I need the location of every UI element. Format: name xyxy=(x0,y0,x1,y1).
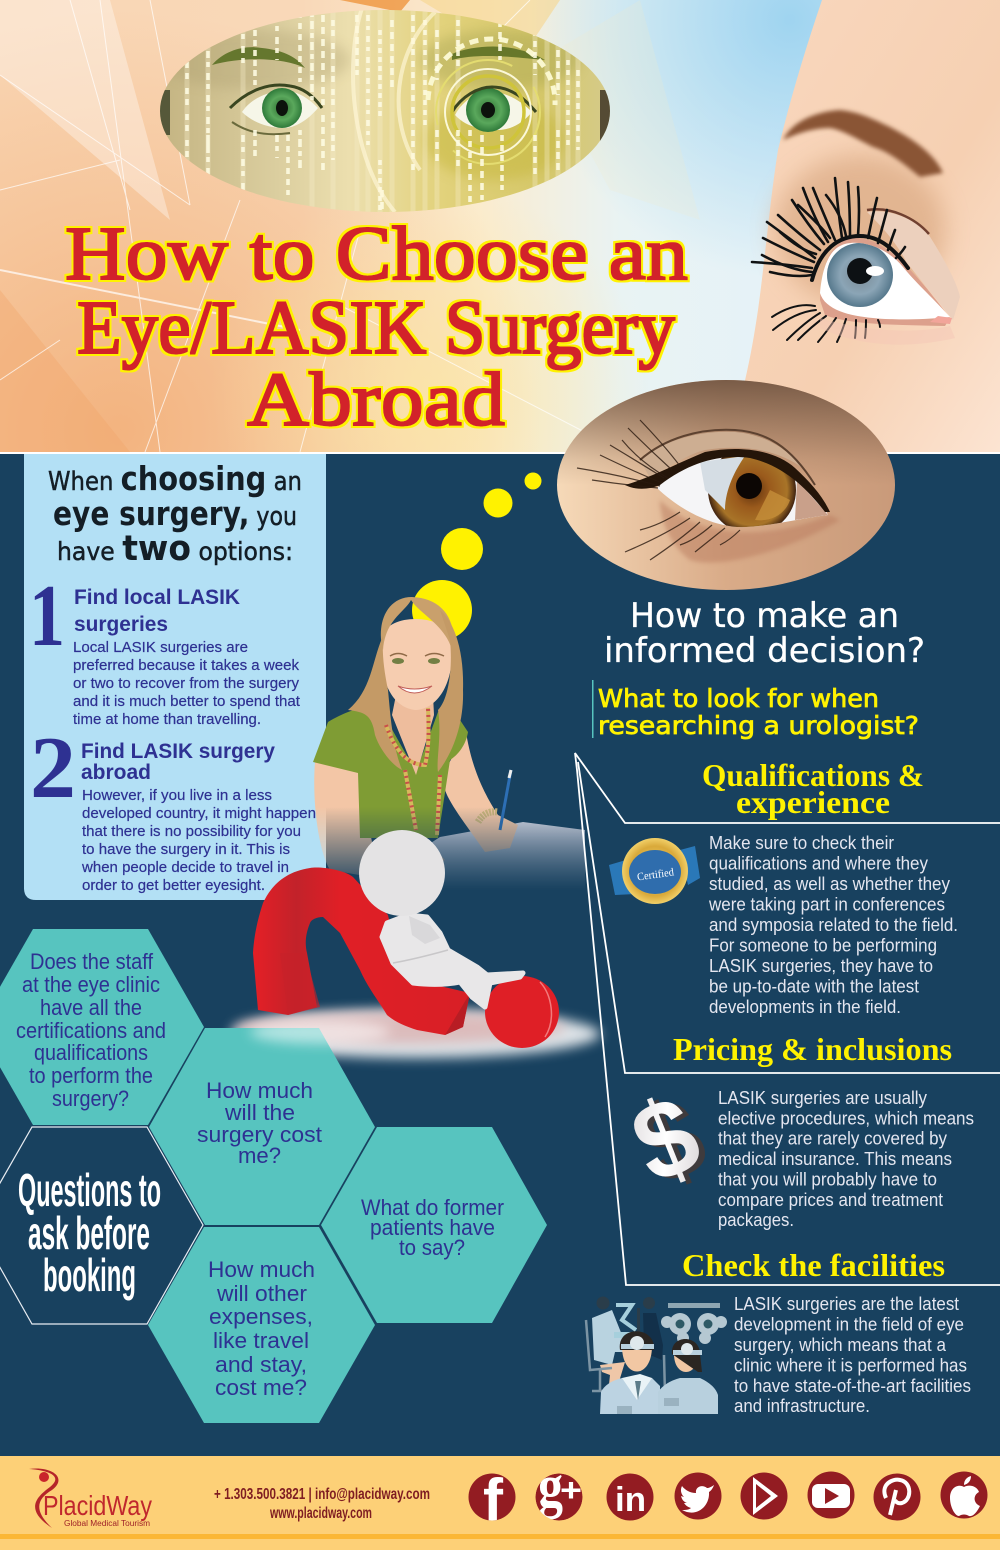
option 2: 2 xyxy=(30,720,76,817)
hexagon: former patients: patients have xyxy=(370,1215,495,1240)
section: qualifications: For someone to be performing xyxy=(709,936,937,956)
option 1: or two to recover from the surgery xyxy=(73,675,299,692)
icon: eye doctors xyxy=(586,1296,727,1414)
section: qualifications: experience xyxy=(736,784,890,820)
section: qualifications: Make sure to check their xyxy=(709,833,894,853)
icon: facebook xyxy=(468,1474,516,1520)
hexagon: questions heading: ask before xyxy=(28,1207,150,1259)
title: How to Choose an xyxy=(65,212,688,296)
brown eye oval xyxy=(557,380,895,590)
icon: play store xyxy=(740,1472,788,1520)
hexagon: questions heading: Questions to xyxy=(18,1164,161,1216)
title xyxy=(65,212,688,442)
red question mark with white figure xyxy=(253,830,559,1048)
option 1: and it is much better to spend that xyxy=(73,693,301,710)
eye socket shading xyxy=(775,155,945,305)
right eye xyxy=(428,39,555,164)
social icons xyxy=(468,1472,988,1520)
top oval: digital eyes xyxy=(158,8,612,212)
logo xyxy=(29,1469,152,1528)
hexagon: surgery cost: me? xyxy=(238,1143,281,1168)
hexagon: staff certifications: to perform the xyxy=(29,1063,153,1088)
hexagon: other expenses: will other xyxy=(216,1281,307,1306)
panel heading xyxy=(48,459,302,569)
hexagon: questions heading: booking xyxy=(43,1249,136,1301)
option 2: to have the surgery in it. This is xyxy=(82,841,290,858)
title: Eye/LASIK Surgery xyxy=(77,286,675,370)
researching sub-heading xyxy=(592,680,919,740)
upper lash line xyxy=(625,449,830,512)
eye white xyxy=(820,243,950,319)
navy background xyxy=(0,454,1000,1456)
section: qualifications: studied, as well as whether they xyxy=(709,874,950,894)
icon: google plus xyxy=(536,1474,582,1520)
hexagon: former patients: to say? xyxy=(399,1235,465,1260)
section: pricing: packages. xyxy=(718,1210,794,1230)
option 1: Local LASIK surgeries are xyxy=(73,639,248,656)
section: facilities: and infrastructure. xyxy=(734,1396,870,1416)
callout bracket lines xyxy=(575,753,1000,1285)
option 1: preferred because it takes a week xyxy=(73,657,300,674)
section: pricing: medical insurance. This means xyxy=(718,1149,952,1169)
hexagon: staff certifications xyxy=(0,929,204,1125)
logo: Global Medical Tourism xyxy=(64,1519,150,1528)
icon: youtube xyxy=(808,1472,854,1518)
hexagon: other expenses: How much xyxy=(208,1257,315,1282)
section: qualifications xyxy=(609,757,958,1017)
contact details: www.placidway.com xyxy=(269,1505,372,1522)
hexagon: surgery cost: will the xyxy=(224,1100,295,1125)
section: qualifications: qualifications and where they xyxy=(709,854,928,874)
icon: facebook: f xyxy=(483,1467,504,1534)
section: pricing: LASIK surgeries are usually xyxy=(718,1088,927,1108)
option 1: 1 xyxy=(29,568,65,665)
logo: PlacidWay xyxy=(43,1490,152,1521)
hexagon: former patients xyxy=(321,1127,547,1323)
icon: dollar sign: $ xyxy=(616,1072,716,1207)
necklace xyxy=(386,708,440,835)
question mark hook xyxy=(253,867,470,1035)
section: facilities: to have state-of-the-art facilities xyxy=(734,1376,971,1396)
section: pricing: that you will probably have to xyxy=(718,1170,937,1190)
panel heading: eye surgery, you xyxy=(53,494,297,533)
hexagon: surgery cost: How much xyxy=(206,1078,313,1103)
option 2: developed country, it might happen xyxy=(82,805,316,822)
section: qualifications: Qualifications & xyxy=(702,757,924,793)
figure xyxy=(359,830,523,1007)
icon: certified badge xyxy=(609,838,700,904)
hexagon: questions heading xyxy=(0,1127,203,1324)
bracelet xyxy=(478,812,498,822)
hexagon: staff certifications: Does the staff xyxy=(30,949,154,974)
option 2: However, if you live in a less xyxy=(82,787,272,804)
section: qualifications: were taking part in conferences xyxy=(708,894,945,914)
girl writing xyxy=(313,597,585,892)
researching sub-heading: What to look for when xyxy=(598,684,879,713)
panel: two options xyxy=(24,454,326,900)
right section heading: How to make an xyxy=(630,596,899,636)
face xyxy=(381,619,452,710)
section: facilities: LASIK surgeries are the latest xyxy=(734,1294,959,1314)
neck xyxy=(392,695,434,775)
section: qualifications: developments in the field. xyxy=(709,997,901,1017)
hexagon: staff certifications: qualifications xyxy=(34,1040,148,1065)
option 1: surgeries xyxy=(74,613,168,636)
icon: linkedin: in xyxy=(615,1481,646,1519)
hexagon: other expenses: and stay, xyxy=(215,1352,307,1377)
section: qualifications: LASIK surgeries, they have to xyxy=(709,956,933,976)
option 2: that there is no possibility for you xyxy=(82,823,301,840)
title: Abroad xyxy=(247,358,505,442)
panel heading: have two options: xyxy=(57,529,293,569)
option 1 xyxy=(29,568,301,728)
option 2 xyxy=(30,720,316,894)
section: facilities: clinic where it is performed has xyxy=(734,1356,967,1376)
hexagon: surgery cost: surgery cost xyxy=(197,1122,322,1147)
hexagon: other expenses xyxy=(148,1227,375,1423)
option 2: Find LASIK surgery xyxy=(81,740,275,763)
hexagon: staff certifications: surgery? xyxy=(52,1086,129,1111)
section: facilities: development in the field of eye xyxy=(734,1314,964,1334)
right section heading: informed decision? xyxy=(604,631,925,671)
icon: dollar sign: $ xyxy=(622,1073,722,1209)
icon: twitter xyxy=(674,1472,722,1520)
option 2: when people decide to travel in xyxy=(81,859,289,876)
section: pricing xyxy=(616,1031,974,1230)
section: pricing: Pricing & inclusions xyxy=(673,1031,952,1067)
pale eyelid band xyxy=(640,432,805,478)
icon: linkedin xyxy=(606,1474,654,1520)
thought bubbles xyxy=(412,472,542,640)
option 1: time at home than travelling. xyxy=(73,711,261,728)
shadow over hexagon edge xyxy=(250,1020,390,1044)
section: pricing: that they are rarely covered by xyxy=(718,1128,947,1148)
eye white xyxy=(657,455,828,527)
hexagon: other expenses: cost me? xyxy=(215,1375,307,1400)
icon: google plus: + xyxy=(560,1472,582,1508)
hexagon: staff certifications: at the eye clinic xyxy=(22,972,160,997)
option 2: abroad xyxy=(81,761,151,784)
ground shadow xyxy=(230,1010,600,1058)
icon: google plus: g xyxy=(538,1453,563,1519)
eyelashes xyxy=(752,178,908,342)
hexagon: surgery cost xyxy=(149,1028,375,1225)
lower lid shading xyxy=(660,500,840,563)
icon: certified badge: Certified xyxy=(636,866,675,883)
hexagon: staff certifications: certifications and xyxy=(16,1018,166,1043)
hexagon: former patients: What do former xyxy=(361,1195,504,1220)
hexagon: other expenses: like travel xyxy=(213,1328,309,1353)
left arm xyxy=(314,762,445,882)
footer xyxy=(0,1453,1000,1550)
shirt xyxy=(313,707,468,838)
eyelid xyxy=(867,211,960,320)
option 2: order to get better eyesight. xyxy=(82,877,265,894)
hexagon: other expenses: expenses, xyxy=(209,1304,313,1329)
section: facilities xyxy=(586,1247,971,1416)
section: qualifications: be up-to-date with the latest xyxy=(709,976,919,996)
left eye xyxy=(212,47,322,134)
panel heading: When choosing an xyxy=(48,459,302,498)
hair strands xyxy=(348,636,402,770)
section: pricing: compare prices and treatment xyxy=(718,1190,943,1210)
section: facilities: surgery, which means that a xyxy=(734,1335,947,1355)
hero bottom rule xyxy=(0,452,1000,454)
section: qualifications: and symposia related to the field. xyxy=(709,915,958,935)
icon: apple xyxy=(940,1472,988,1518)
pencil xyxy=(500,770,511,830)
lashes xyxy=(577,420,740,560)
hexagon: staff certifications: have all the xyxy=(40,995,142,1020)
option 1: Find local LASIK xyxy=(74,586,240,609)
eyebrow xyxy=(783,110,943,177)
right section heading xyxy=(604,596,925,671)
blue iris xyxy=(827,243,893,307)
section: pricing: elective procedures, which means xyxy=(718,1108,974,1128)
question mark dot xyxy=(485,976,559,1048)
right arm xyxy=(445,732,518,852)
hero banner xyxy=(0,0,822,452)
face with blue eye xyxy=(725,0,1000,452)
contact details xyxy=(214,1486,430,1522)
section: facilities: Check the facilities xyxy=(682,1247,945,1283)
researching sub-heading: researching a urologist? xyxy=(598,711,919,740)
contact details: + 1.303.500.3821 | info@placidway.com xyxy=(214,1486,430,1503)
icon: pinterest xyxy=(874,1474,920,1520)
